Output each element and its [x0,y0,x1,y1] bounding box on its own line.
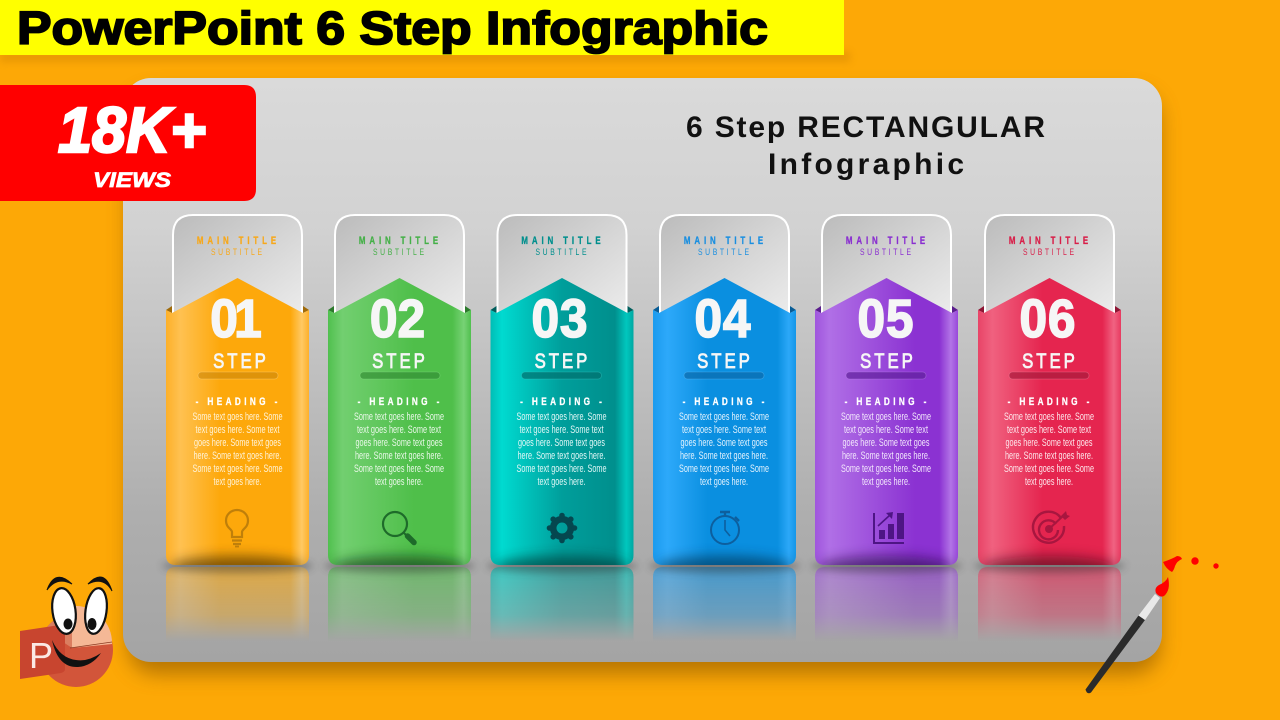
floor shadow 1 [162,559,314,573]
icon: paint brush [1086,556,1219,693]
title bar shadow [0,52,850,62]
slide heading: 6 Step RECTANGULAR [686,111,1045,144]
body text 5: text goes here. Some text [844,424,928,436]
reflection 4 [653,567,796,641]
panel: infographic slide [123,78,1162,662]
icon: stopwatch [711,512,739,544]
subtitle 5: SUBTITLE [860,247,911,257]
body text 4: text goes here. Some text [682,424,766,436]
smile [52,640,101,667]
body text 5: goes here. Some text goes [842,437,930,449]
slot 2 [360,372,440,379]
body text 2: goes here. Some text goes [356,437,443,449]
body 2 [328,278,471,565]
icon: light bulb [226,510,248,546]
slot 3 [522,372,602,379]
slide heading [686,111,1045,181]
mascot: PowerPoint face [20,577,113,687]
views label: VIEWS [93,169,171,192]
step card 5 [810,215,962,641]
reflection 6 [978,567,1121,641]
step 6: STEP [1022,350,1075,374]
fold 1 [166,306,309,313]
step card 3 [486,215,638,641]
left eye [49,587,79,635]
subtitle 4: SUBTITLE [698,247,749,257]
main title 1: MAIN TITLE [197,235,277,247]
brush handle [1086,616,1145,693]
body text 6: Some text goes here. Some [1004,411,1094,423]
bottom shade 2 [330,548,470,565]
body text 2 [354,411,444,488]
body text 2: text goes here. Some text [357,424,441,436]
body text 3: text goes here. [538,476,586,488]
body text 3: Some text goes here. Some [516,411,606,423]
step card 4 [648,215,800,641]
body text 3: here. Some text goes here. [518,450,606,462]
body text 1: Some text goes here. Some [192,411,282,423]
views badge [0,85,256,201]
body text 6: text goes here. Some text [1007,424,1091,436]
fold 3 [490,306,634,313]
number 6: 06 [1019,288,1076,348]
brush ferrule [1138,594,1160,620]
step 5: STEP [860,350,913,374]
subtitle 6: SUBTITLE [1023,247,1074,257]
floor shadow 5 [810,559,962,573]
body text 2: text goes here. [375,476,423,488]
number 5: 05 [857,288,914,348]
step 1: STEP [213,350,266,374]
main title 5: MAIN TITLE [846,235,926,247]
number 2: 02 [370,288,425,348]
P tile [20,625,65,679]
body text 4: here. Some text goes here. [680,450,768,462]
body text 3: Some text goes here. Some [516,463,606,475]
eyebrows [47,577,112,591]
body text 3: goes here. Some text goes [518,437,605,449]
body 3 [490,278,634,565]
bottom shade 1 [167,548,308,565]
body text 6 [1004,411,1094,488]
number 4: 04 [694,288,751,348]
paint drop small [1213,563,1219,569]
title bar [0,0,844,55]
heading 2: - HEADING - [358,396,439,408]
icon: target [1033,511,1070,543]
body text 3: text goes here. Some text [520,424,604,436]
body text 4: text goes here. [700,476,748,488]
slot 4 [684,372,764,379]
step 3: STEP [535,350,587,374]
body text 5 [841,411,931,488]
fold 5 [815,306,958,313]
body text 4 [679,411,769,488]
body text 1: here. Some text goes here. [194,450,282,462]
body text 4: Some text goes here. Some [679,463,769,475]
tab 5 [822,215,951,316]
title: PowerPoint 6 Step Infographic [17,2,768,54]
floor shadow 4 [648,559,800,573]
heading 3: - HEADING - [520,396,602,408]
reflection 5 [815,567,958,641]
body text 1: Some text goes here. Some [192,463,282,475]
fold 2 [328,306,471,313]
heading 1: - HEADING - [196,396,277,408]
body text 6: goes here. Some text goes [1006,437,1093,449]
body text 6: text goes here. [1025,476,1073,488]
number 1: 01 [210,288,262,348]
bottom shade 3 [492,549,632,565]
subtitle 3: SUBTITLE [535,247,587,257]
body text 2: Some text goes here. Some [354,411,444,423]
paint drop large [1191,557,1199,565]
step card 1 [162,215,314,641]
body text 1: text goes here. [214,476,262,488]
body text 4: Some text goes here. Some [679,411,769,423]
subtitle 1: SUBTITLE [211,247,262,257]
heading 6: - HEADING - [1008,396,1089,408]
floor shadow 6 [974,559,1126,573]
reflection 3 [490,567,634,641]
panel shadow [128,92,1160,674]
main title 3: MAIN TITLE [521,235,601,247]
body text 5: text goes here. [862,476,910,488]
views count: 18K+ [58,94,206,166]
tab 2 [335,215,464,316]
slot 6 [1009,372,1089,379]
body text 6: Some text goes here. Some [1004,463,1094,475]
reflection 2 [328,567,471,641]
floor shadow 3 [486,559,638,573]
heading 5: - HEADING - [845,396,926,408]
brush bristles [1155,577,1169,597]
heading 4: - HEADING - [683,396,764,408]
P letter: P [29,635,53,676]
body 5 [815,278,958,565]
icon: gear [547,513,577,543]
right eye [82,587,110,635]
tab 1 [173,215,302,316]
bottom shade 5 [816,548,956,565]
body text 1: text goes here. Some text [196,424,280,436]
bottom shade 4 [654,548,794,565]
tab 4 [660,215,789,316]
body text 6: here. Some text goes here. [1005,450,1093,462]
left pupil [64,618,72,630]
bottom shade 6 [980,548,1120,565]
slot 5 [846,372,926,379]
floor shadow 2 [324,559,476,573]
step 4: STEP [697,350,750,374]
step 2: STEP [372,350,425,374]
slot 1 [198,372,278,379]
fold 4 [653,306,796,313]
tab 6 [985,215,1114,316]
body text 4: goes here. Some text goes [680,437,768,449]
reflection 1 [166,567,309,641]
body text 2: Some text goes here. Some [354,463,444,475]
body text 5: Some text goes here. Some [841,411,931,423]
icon: magnifier [383,512,414,542]
icon: bar chart [873,512,904,544]
body text 3 [516,411,606,488]
slide heading: Infographic [768,148,964,181]
step card 2 [324,215,476,641]
body text 1 [192,411,282,488]
number 3: 03 [531,288,588,348]
pie body [39,613,113,687]
body text 2: here. Some text goes here. [355,450,443,462]
right pupil [88,618,96,630]
body 4 [653,278,796,565]
body text 1: goes here. Some text goes [194,437,281,449]
body 6 [978,278,1121,565]
paint splat [1163,556,1182,572]
body text 5: Some text goes here. Some [841,463,931,475]
subtitle 2: SUBTITLE [373,247,424,257]
step card 6 [974,215,1126,641]
main title 6: MAIN TITLE [1009,235,1089,247]
body 1 [166,278,309,565]
body text 5: here. Some text goes here. [842,450,930,462]
fold 6 [978,306,1121,313]
tab 3 [498,215,626,316]
main title 2: MAIN TITLE [359,235,439,247]
main title 4: MAIN TITLE [684,235,764,247]
